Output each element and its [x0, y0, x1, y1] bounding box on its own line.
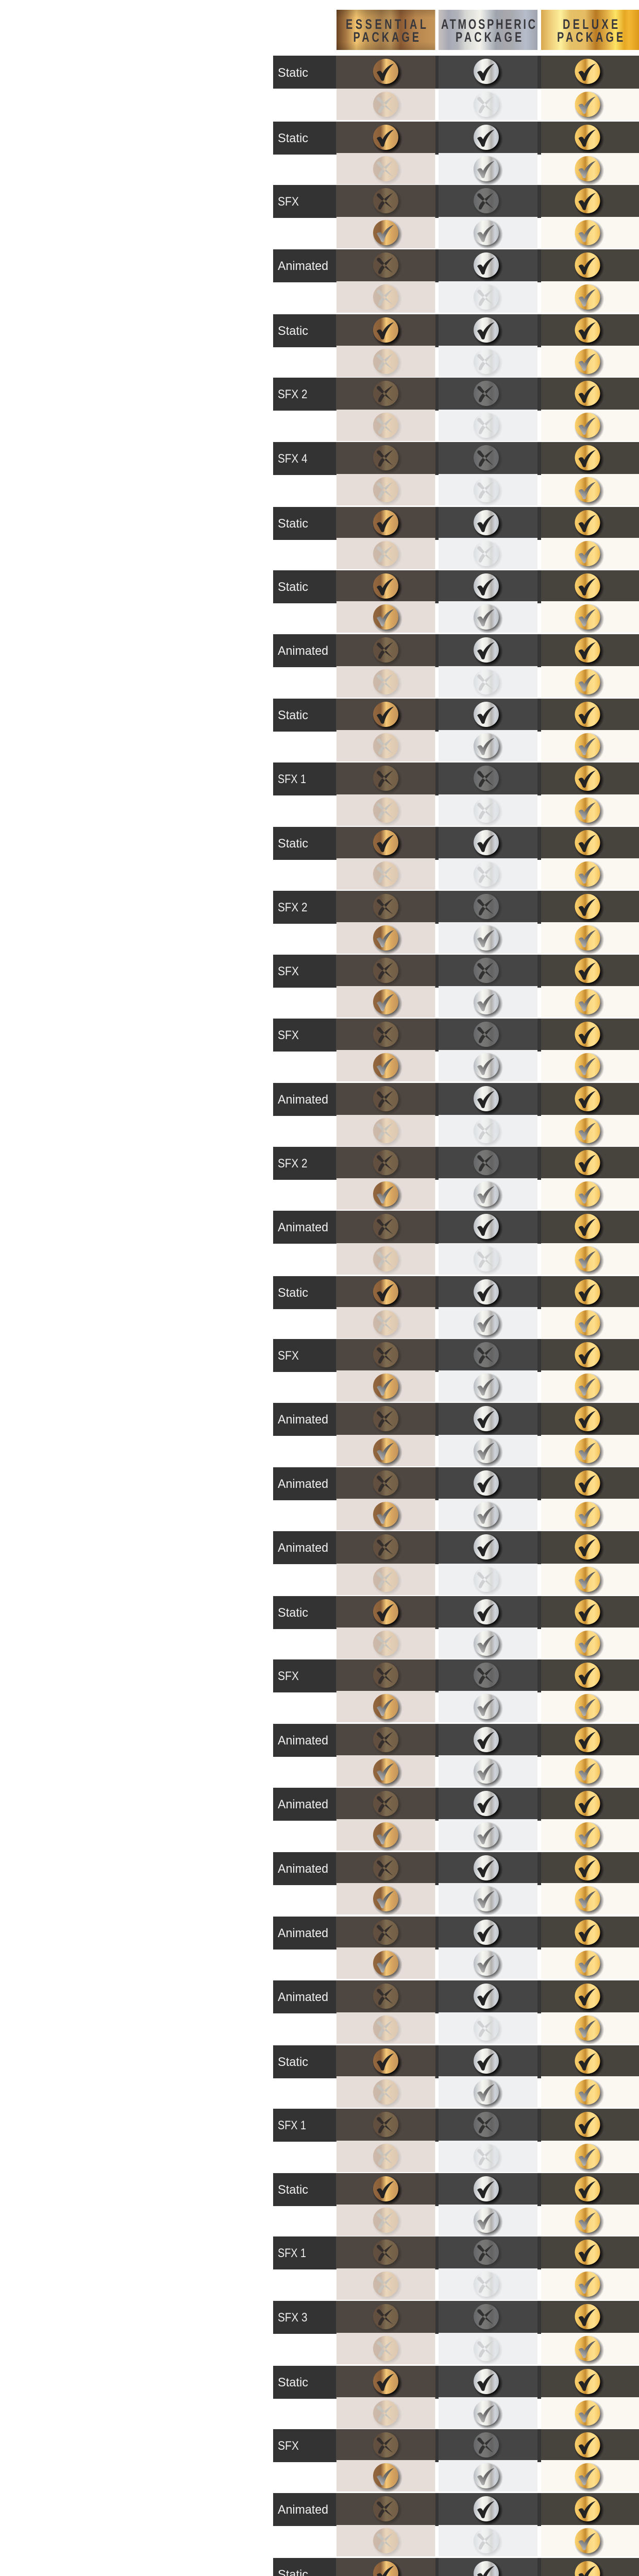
row 33: SFX 1: SFX 1 [278, 2119, 306, 2132]
row 34: Static [273, 2173, 639, 2206]
row 14: SFX 2: SFX 2 [278, 901, 307, 914]
row 39: Animated [273, 2493, 639, 2526]
row 12: SFX 1 [273, 762, 639, 795]
header: atmospheric package: ATMOSPHERIC [441, 16, 535, 32]
row 32 alternate [337, 2076, 639, 2109]
row 31: Animated: Animated [278, 1990, 328, 2004]
row 8: Static [273, 507, 639, 540]
row 18: SFX 2: SFX 2 [278, 1157, 307, 1171]
row 3: SFX [273, 185, 639, 218]
row 8: Static: Static [278, 517, 308, 531]
row 24: Animated: Animated [278, 1541, 328, 1555]
row 5 alternate [337, 346, 639, 378]
row 20: Static: Static [278, 1286, 308, 1300]
row 37 alternate [337, 2397, 639, 2430]
row 31: Animated [273, 1980, 639, 2013]
row 2: Static [273, 122, 639, 155]
header: atmospheric package [439, 10, 537, 50]
row 10: Animated [273, 634, 639, 667]
row 28: Animated: Animated [278, 1798, 328, 1811]
row 32: Static: Static [278, 2055, 308, 2069]
row 13 alternate [337, 858, 639, 891]
row 36: SFX 3 [273, 2301, 639, 2334]
row 15: SFX: SFX [278, 964, 299, 978]
row 23: Animated: Animated [278, 1477, 328, 1491]
row 13: Static [273, 827, 639, 860]
row 25: Static [273, 1596, 639, 1629]
row 29 alternate [337, 1883, 639, 1916]
row 12: SFX 1: SFX 1 [278, 772, 306, 786]
row 13: Static: Static [278, 837, 308, 851]
row 34: Static: Static [278, 2183, 308, 2197]
row 17: Animated [273, 1083, 639, 1116]
row 34 alternate [337, 2205, 639, 2237]
header: deluxe package: PACKAGE [557, 29, 623, 45]
row 16: SFX: SFX [278, 1028, 299, 1042]
header: essential package [337, 10, 435, 50]
row 6 alternate [337, 410, 639, 442]
row 30: Animated: Animated [278, 1926, 328, 1940]
row 23: Animated [273, 1467, 639, 1500]
row 1: Static: Static [278, 66, 308, 80]
row 35 alternate [337, 2268, 639, 2301]
row 16 alternate [337, 1050, 639, 1082]
row 28: Animated [273, 1788, 639, 1821]
row 38: SFX: SFX [278, 2439, 299, 2453]
row 19: Animated [273, 1211, 639, 1244]
row 6: SFX 2: SFX 2 [278, 387, 307, 401]
row 40: Static [273, 2558, 639, 2576]
row 1: Static [273, 56, 639, 89]
row 19: Animated: Animated [278, 1221, 328, 1234]
row 16: SFX [273, 1019, 639, 1052]
row 3: SFX: SFX [278, 195, 299, 209]
row 27: Animated [273, 1724, 639, 1757]
row 38 alternate [337, 2460, 639, 2493]
row 1 alternate [337, 89, 639, 121]
header: deluxe package: DELUXE [563, 16, 618, 32]
row 39: Animated: Animated [278, 2503, 328, 2517]
header: essential package: ESSENTIAL [346, 16, 426, 32]
row 18 alternate [337, 1178, 639, 1211]
row 30: Animated [273, 1917, 639, 1950]
row 19 alternate [337, 1243, 639, 1276]
row 39 alternate [337, 2525, 639, 2557]
row 4: Animated: Animated [278, 259, 328, 273]
row 9: Static: Static [278, 580, 308, 594]
row 20: Static [273, 1276, 639, 1309]
header: deluxe package [541, 10, 639, 50]
row 15 alternate [337, 986, 639, 1019]
row 23 alternate [337, 1499, 639, 1531]
row 36: SFX 3: SFX 3 [278, 2311, 307, 2325]
row 37: Static: Static [278, 2376, 308, 2389]
row 27: Animated: Animated [278, 1734, 328, 1748]
row 15: SFX [273, 955, 639, 988]
row 8 alternate [337, 538, 639, 570]
row 24: Animated [273, 1531, 639, 1564]
row 22: Animated: Animated [278, 1413, 328, 1427]
row 2 alternate [337, 153, 639, 185]
row 11: Static: Static [278, 708, 308, 722]
row 22: Animated [273, 1403, 639, 1436]
row 4 alternate [337, 281, 639, 314]
row 17: Animated: Animated [278, 1093, 328, 1107]
row 22 alternate [337, 1435, 639, 1467]
row 26: SFX [273, 1659, 639, 1692]
row 4: Animated [273, 249, 639, 282]
row 21: SFX: SFX [278, 1349, 299, 1363]
row 11: Static [273, 699, 639, 732]
row 9: Static [273, 570, 639, 603]
row 25: Static: Static [278, 1606, 308, 1620]
row 7 alternate [337, 474, 639, 506]
row 29: Animated: Animated [278, 1862, 328, 1876]
row 10: Animated: Animated [278, 644, 328, 658]
row 17 alternate [337, 1115, 639, 1147]
header: essential package: PACKAGE [354, 29, 419, 45]
row 14 alternate [337, 922, 639, 955]
row 27 alternate [337, 1755, 639, 1788]
row 26 alternate [337, 1691, 639, 1723]
row 10 alternate [337, 666, 639, 699]
row 38: SFX [273, 2429, 639, 2462]
row 3 alternate [337, 217, 639, 249]
row 32: Static [273, 2045, 639, 2078]
row 33 alternate [337, 2141, 639, 2173]
row 6: SFX 2 [273, 378, 639, 411]
row 5: Static: Static [278, 324, 308, 338]
row 9 alternate [337, 601, 639, 634]
row 18: SFX 2 [273, 1147, 639, 1180]
row 25 alternate [337, 1628, 639, 1660]
row 7: SFX 4: SFX 4 [278, 452, 307, 466]
row 33: SFX 1 [273, 2109, 639, 2142]
row 28 alternate [337, 1819, 639, 1852]
row 24 alternate [337, 1564, 639, 1596]
row 7: SFX 4 [273, 442, 639, 475]
header: atmospheric package: PACKAGE [456, 29, 522, 45]
row 31 alternate [337, 2012, 639, 2045]
row 35: SFX 1 [273, 2236, 639, 2269]
row 29: Animated [273, 1852, 639, 1885]
row 12 alternate [337, 794, 639, 827]
row 21 alternate [337, 1370, 639, 1403]
row 11 alternate [337, 730, 639, 762]
row 21: SFX [273, 1339, 639, 1372]
row 26: SFX: SFX [278, 1669, 299, 1683]
row 30 alternate [337, 1947, 639, 1980]
row 2: Static: Static [278, 131, 308, 145]
row 37: Static [273, 2366, 639, 2399]
row 14: SFX 2 [273, 891, 639, 924]
row 35: SFX 1: SFX 1 [278, 2246, 306, 2260]
row 36 alternate [337, 2333, 639, 2365]
row 5: Static [273, 314, 639, 347]
row 20 alternate [337, 1307, 639, 1340]
